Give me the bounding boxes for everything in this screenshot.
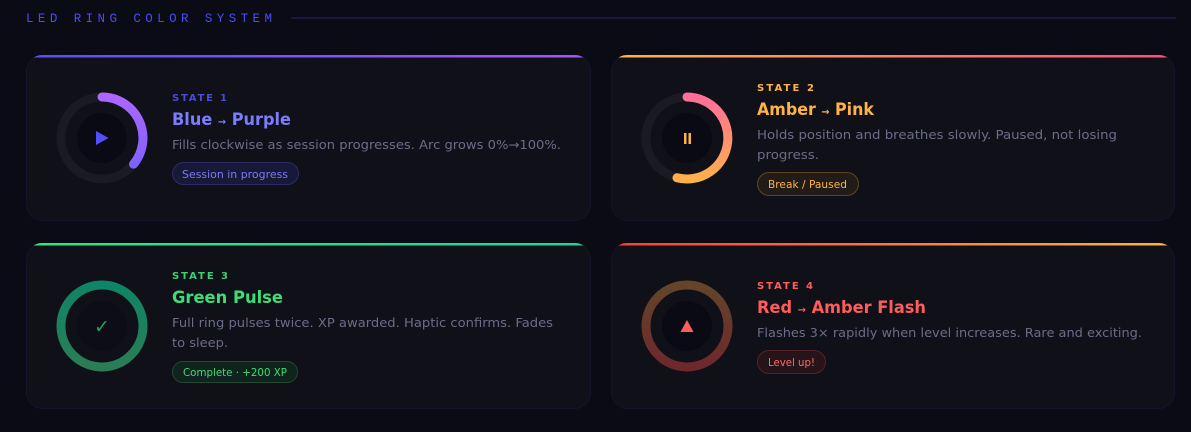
text: state 1 label: STATE 1 bbox=[172, 93, 227, 104]
text: state 2 description bbox=[757, 127, 1117, 162]
badge: complete xp: Complete · +200 XP bbox=[183, 367, 287, 379]
heading: red to amber flash: Red → Amber Flash bbox=[757, 298, 926, 317]
panel: state 4 bbox=[611, 243, 1175, 408]
icon: amber to pink paused ring bbox=[646, 97, 728, 179]
panel: state 1 bbox=[26, 55, 591, 220]
badge: session in progress bbox=[172, 162, 298, 184]
heading: amber to pink: Amber → Pink bbox=[757, 100, 875, 119]
icon: blue to purple progress ring bbox=[61, 97, 143, 179]
text: state 1 description: Fills clockwise as session progresses. Arc grows 0%→100%. bbox=[172, 137, 561, 152]
text: state 2 description: Holds position and breathes slowly. Paused, not losing bbox=[757, 127, 1117, 142]
badge: break paused bbox=[758, 172, 858, 196]
text: state 3 description: Full ring pulses twice. XP awarded. Haptic confirms. Fades bbox=[172, 315, 553, 330]
badge: level up bbox=[758, 350, 826, 374]
badge: session in progress: Session in progress bbox=[182, 169, 288, 181]
icon: green full pulse ring: ✓ bbox=[94, 316, 110, 338]
badge: break paused: Break / Paused bbox=[768, 179, 847, 191]
badge: complete xp bbox=[172, 362, 298, 382]
text: state 4 description: Flashes 3× rapidly when level increases. Rare and exciting. bbox=[757, 325, 1142, 340]
heading: blue to purple: Blue → Purple bbox=[172, 110, 291, 129]
text: state 2 description: progress. bbox=[757, 147, 819, 162]
text: state 3 description: to sleep. bbox=[172, 335, 228, 350]
panel: state 3 bbox=[26, 243, 591, 408]
text: state 2 label: STATE 2 bbox=[757, 83, 814, 94]
icon: green full pulse ring bbox=[61, 285, 143, 367]
text: state 3 description bbox=[172, 315, 553, 350]
text: state 4 label: STATE 4 bbox=[757, 281, 813, 292]
heading: green pulse: Green Pulse bbox=[172, 288, 283, 307]
icon: red to amber flash ring bbox=[646, 285, 728, 367]
badge: level up: Level up! bbox=[768, 357, 815, 369]
text: state 3 label: STATE 3 bbox=[172, 271, 228, 282]
section heading: LED RING COLOR SYSTEM bbox=[26, 12, 272, 26]
panel: state 2 bbox=[611, 55, 1175, 220]
